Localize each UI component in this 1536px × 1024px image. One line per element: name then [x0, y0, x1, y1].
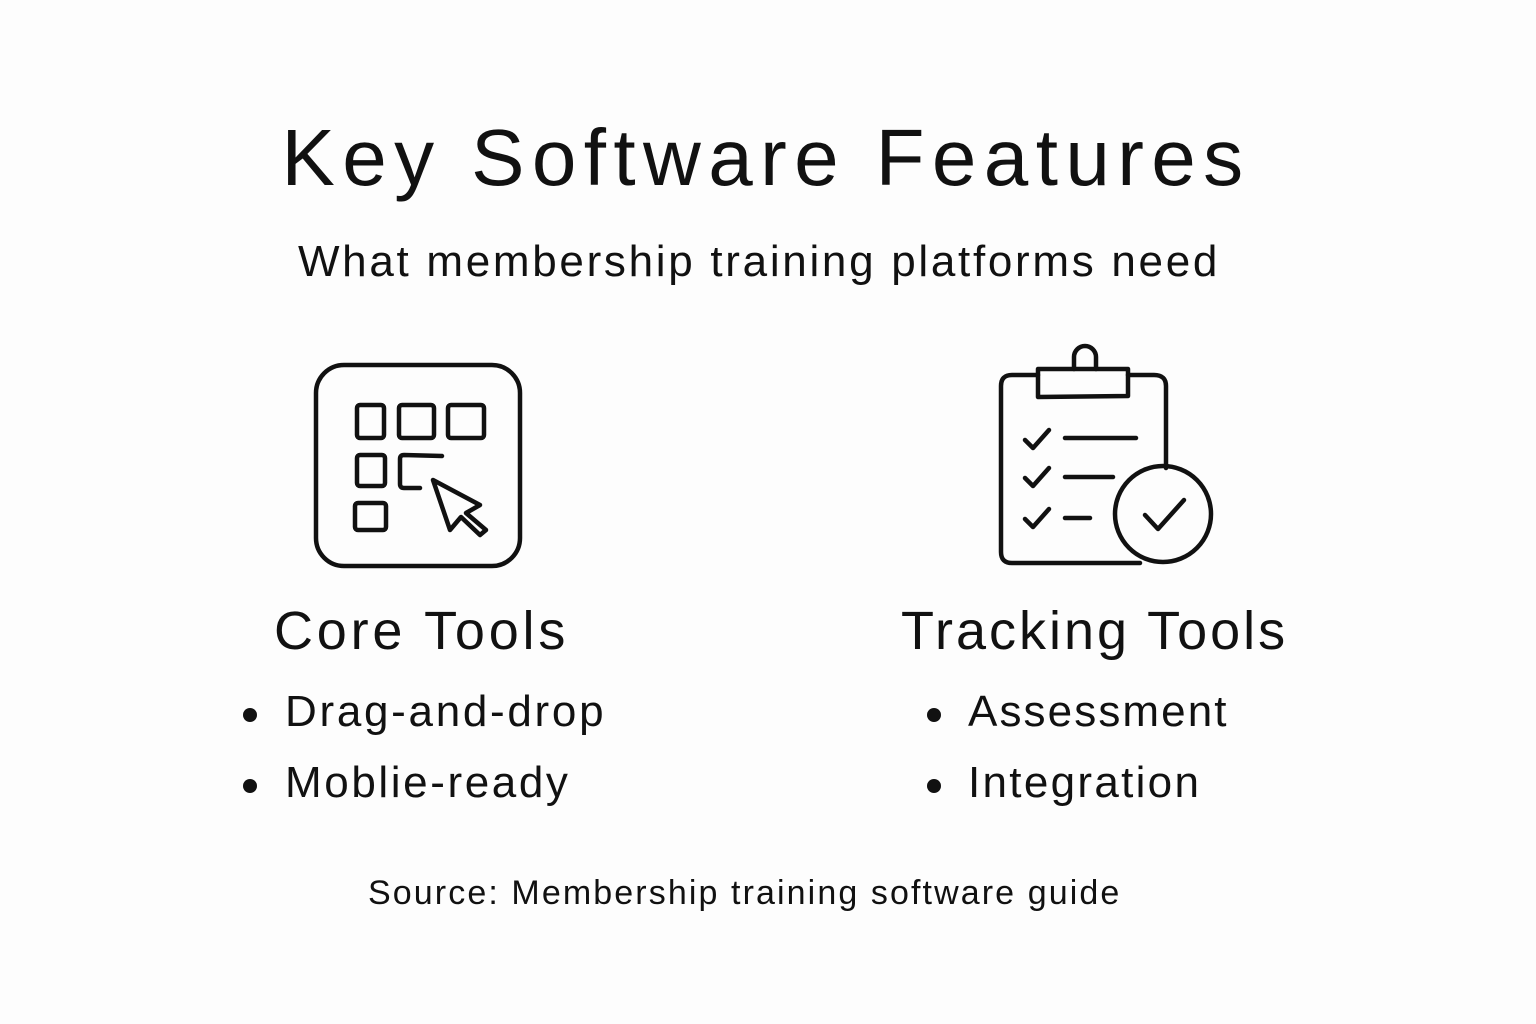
list: core tools [243, 687, 606, 807]
text: Assessment [968, 687, 1229, 736]
source note: Source: Membership training software guide [368, 874, 1121, 912]
list: tracking tools [927, 687, 1229, 807]
text: Integration [968, 758, 1201, 807]
text: Drag-and-drop [285, 687, 606, 736]
title: Key Software Features [281, 113, 1251, 202]
heading: tracking tools: Tracking Tools [901, 601, 1288, 661]
text: Moblie-ready [285, 758, 571, 807]
subtitle: What membership training platforms need [298, 237, 1220, 286]
heading: core tools: Core Tools [274, 601, 569, 661]
